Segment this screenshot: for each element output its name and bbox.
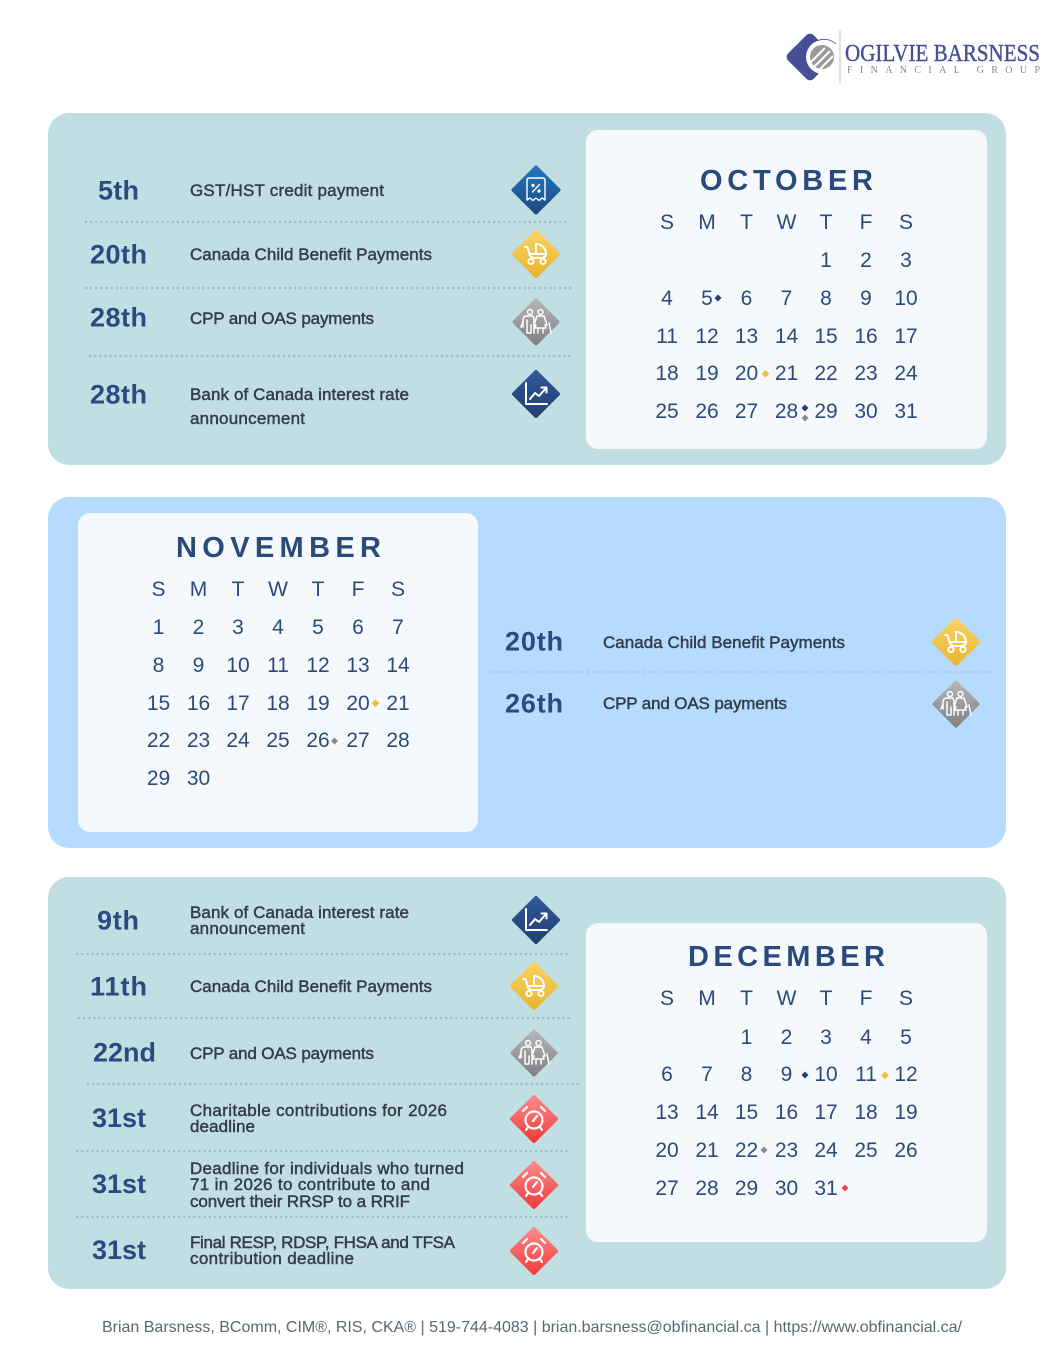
calendar dates: 4 bbox=[661, 287, 673, 310]
calendar dates: 8 bbox=[153, 654, 164, 677]
calendar dates: 1 bbox=[153, 616, 164, 639]
month title: NOVEMBER bbox=[176, 532, 381, 564]
calendar dates: 2 bbox=[781, 1026, 792, 1049]
calendar dates: 25 bbox=[854, 1139, 878, 1162]
calendar dates: 23 bbox=[854, 362, 878, 385]
calendar dates: T bbox=[740, 987, 753, 1010]
calendar dates: 15 bbox=[147, 692, 170, 715]
calendar: December bbox=[586, 923, 987, 1242]
icon: alarm clock bbox=[512, 1229, 556, 1273]
calendar dates: 25 bbox=[266, 729, 290, 752]
October row: 28th Bank of Canada bbox=[90, 372, 558, 428]
December row: 31st RESP bbox=[92, 1229, 556, 1273]
icon: seniors bbox=[514, 300, 558, 344]
October row: 28th Bank of Canada: announcement bbox=[190, 409, 305, 428]
panel: October bbox=[48, 113, 1006, 465]
December row: 9th: announcement bbox=[190, 919, 305, 938]
icon: chart bbox=[514, 372, 558, 416]
calendar dates: 18 bbox=[266, 692, 290, 715]
calendar dates: T bbox=[312, 578, 325, 601]
December row: 31st charitable: Charitable contributions for 2026 bbox=[190, 1101, 447, 1120]
calendar dates: S bbox=[660, 987, 674, 1010]
icon: alarm clock bbox=[512, 1097, 556, 1141]
calendar dates: 6 bbox=[661, 1063, 673, 1086]
calendar dates: 9 bbox=[860, 287, 872, 310]
October row: 5th: GST/HST credit payment bbox=[190, 181, 384, 200]
calendar dates: 27 bbox=[346, 729, 370, 752]
calendar dates: W bbox=[268, 578, 288, 601]
month title: OCTOBER bbox=[700, 165, 873, 197]
calendar dates: 9 bbox=[193, 654, 204, 677]
calendar dates: T bbox=[820, 211, 833, 234]
calendar dates: 14 bbox=[775, 325, 798, 348]
December row: 31st RRSP: Deadline for individuals who turned bbox=[190, 1159, 464, 1178]
December row: 31st RESP: contribution deadline bbox=[190, 1249, 354, 1268]
calendar dates: 16 bbox=[775, 1101, 798, 1124]
calendar dates: 6 bbox=[741, 287, 752, 310]
calendar dates: 2 bbox=[860, 249, 872, 272]
calendar dates: 17 bbox=[226, 692, 250, 715]
December row: 31st charitable: deadline bbox=[190, 1117, 255, 1136]
calendar dates: 19 bbox=[894, 1101, 918, 1124]
calendar dates: 30 bbox=[187, 767, 210, 790]
date markers bbox=[714, 294, 808, 422]
December row: 22nd: 22nd bbox=[93, 1038, 156, 1068]
calendar dates: 29 bbox=[814, 400, 838, 423]
calendar dates: S bbox=[151, 578, 166, 601]
calendar dates: 19 bbox=[695, 362, 719, 385]
calendar dates: 28 bbox=[775, 400, 798, 423]
calendar dates: M bbox=[698, 987, 716, 1010]
calendar dates: 14 bbox=[386, 654, 410, 677]
December row: 31st RRSP bbox=[92, 1159, 556, 1211]
calendar dates: 21 bbox=[775, 362, 798, 385]
calendar dates: 28 bbox=[386, 729, 410, 752]
calendar dates: 15 bbox=[814, 325, 838, 348]
calendar dates: 31 bbox=[894, 400, 918, 423]
calendar dates: S bbox=[391, 578, 405, 601]
icon: tax receipt bbox=[514, 168, 558, 212]
calendar dates: 26 bbox=[695, 400, 719, 423]
December row: 9th: 9th bbox=[97, 906, 139, 936]
calendar dates: 22 bbox=[735, 1139, 758, 1162]
calendar dates: 24 bbox=[894, 362, 918, 385]
calendar dates: 23 bbox=[187, 729, 210, 752]
calendar dates: 3 bbox=[820, 1026, 832, 1049]
calendar dates: 5 bbox=[900, 1026, 912, 1049]
December row: 31st charitable: 31st bbox=[92, 1103, 146, 1133]
calendar dates: 29 bbox=[147, 767, 170, 790]
October row: 5th bbox=[98, 168, 558, 212]
calendar dates: F bbox=[352, 578, 364, 601]
calendar dates: 11 bbox=[855, 1063, 877, 1086]
December row: 11th: 11th bbox=[90, 972, 147, 1002]
calendar dates: 8 bbox=[820, 287, 832, 310]
calendar dates: 5 bbox=[701, 287, 713, 310]
calendar dates: F bbox=[860, 211, 872, 234]
calendar dates: 25 bbox=[655, 400, 679, 423]
calendar dates: T bbox=[820, 987, 833, 1010]
calendar dates: T bbox=[740, 211, 753, 234]
December row: 9th: Bank of Canada interest rate bbox=[190, 903, 409, 922]
calendar dates bbox=[655, 211, 918, 423]
December row: 11th: Canada Child Benefit Payments bbox=[190, 977, 432, 996]
calendar dates: F bbox=[860, 987, 872, 1010]
calendar dates: 27 bbox=[735, 400, 758, 423]
calendar dates bbox=[147, 578, 410, 790]
calendar dates: T bbox=[232, 578, 245, 601]
icon: stroller bbox=[512, 964, 556, 1008]
panel: November bbox=[48, 497, 1006, 848]
December row: 31st RESP: Final RESP, RDSP, FHSA and TFSA bbox=[190, 1233, 456, 1252]
October row: 5th: 5th bbox=[98, 176, 139, 206]
calendar dates: 4 bbox=[860, 1026, 872, 1049]
calendar dates: 22 bbox=[814, 362, 838, 385]
calendar dates: 21 bbox=[386, 692, 410, 715]
October row: 20th bbox=[90, 232, 558, 276]
calendar dates: W bbox=[777, 211, 797, 234]
panel: December bbox=[48, 877, 1006, 1289]
calendar dates: 26 bbox=[894, 1139, 918, 1162]
logo bbox=[785, 30, 1040, 84]
calendar dates: 1 bbox=[741, 1026, 752, 1049]
calendar dates: 26 bbox=[306, 729, 330, 752]
November row: 20th bbox=[505, 620, 978, 664]
December row: 31st RRSP: 71 in 2026 to contribute to and bbox=[190, 1175, 430, 1194]
November row: 26th: CPP and OAS payments bbox=[603, 694, 787, 713]
calendar dates: 24 bbox=[226, 729, 250, 752]
calendar dates: 11 bbox=[267, 654, 289, 677]
October row: 20th: 20th bbox=[90, 240, 147, 270]
calendar dates: M bbox=[190, 578, 207, 601]
October row: 28th Bank of Canada: Bank of Canada interest rate bbox=[190, 385, 409, 404]
logo mark bbox=[785, 32, 840, 82]
calendar dates: 10 bbox=[226, 654, 250, 677]
calendar dates: 11 bbox=[656, 325, 678, 348]
calendar dates: 7 bbox=[701, 1063, 713, 1086]
footer contact line: Brian Barsness, BComm, CIM®, RIS, CKA® | 519-744-4083 | brian.barsness@obfinancial.ca | https://www.obfinancial.ca/ bbox=[102, 1319, 963, 1336]
icon: stroller bbox=[934, 620, 978, 664]
calendar dates: M bbox=[698, 211, 716, 234]
calendar dates: 12 bbox=[894, 1063, 918, 1086]
calendar dates: 16 bbox=[187, 692, 210, 715]
calendar: October bbox=[586, 130, 987, 449]
calendar dates: 20 bbox=[655, 1139, 679, 1162]
icon: seniors bbox=[934, 682, 978, 726]
October row: 28th Bank of Canada: 28th bbox=[90, 380, 147, 410]
calendar dates: 13 bbox=[735, 325, 758, 348]
calendar dates: 15 bbox=[735, 1101, 758, 1124]
icon: seniors bbox=[512, 1032, 556, 1074]
date markers bbox=[760, 1072, 889, 1192]
calendar dates: 1 bbox=[820, 249, 832, 272]
December row: 31st charitable bbox=[92, 1097, 556, 1141]
calendar dates: 2 bbox=[193, 616, 204, 639]
calendar: November bbox=[78, 513, 478, 832]
calendar dates: 30 bbox=[775, 1177, 798, 1200]
November row: 20th: 20th bbox=[505, 626, 563, 656]
December row: 11th bbox=[90, 964, 556, 1008]
calendar dates: 16 bbox=[854, 325, 878, 348]
December row: 31st RESP: 31st bbox=[92, 1235, 146, 1265]
calendar dates: 18 bbox=[854, 1101, 878, 1124]
calendar dates: 9 bbox=[781, 1063, 792, 1086]
calendar dates: 7 bbox=[781, 287, 792, 310]
calendar dates: 29 bbox=[735, 1177, 758, 1200]
calendar dates: S bbox=[899, 987, 913, 1010]
October row: 28th CPP: 28th bbox=[90, 302, 147, 332]
calendar dates: 5 bbox=[312, 616, 324, 639]
calendar dates: 18 bbox=[655, 362, 679, 385]
calendar dates: 21 bbox=[695, 1139, 719, 1162]
calendar dates: 7 bbox=[392, 616, 404, 639]
December row: 22nd bbox=[93, 1032, 556, 1074]
calendar dates: 6 bbox=[352, 616, 364, 639]
date markers bbox=[331, 700, 379, 744]
calendar dates: S bbox=[899, 211, 913, 234]
calendar dates: 22 bbox=[147, 729, 170, 752]
October row: 28th CPP bbox=[90, 300, 558, 344]
November row: 26th bbox=[505, 682, 978, 726]
logo tagline: FINANCIAL GROUP bbox=[847, 65, 1040, 76]
November row: 26th: 26th bbox=[505, 688, 563, 718]
calendar dates: 8 bbox=[741, 1063, 752, 1086]
calendar dates: W bbox=[777, 987, 797, 1010]
calendar dates: 13 bbox=[346, 654, 370, 677]
October row: 20th: Canada Child Benefit Payments bbox=[190, 245, 432, 264]
calendar dates: 30 bbox=[854, 400, 878, 423]
calendar dates: 17 bbox=[814, 1101, 838, 1124]
calendar dates: 27 bbox=[655, 1177, 679, 1200]
December row: 31st RRSP: convert their RRSP to a RRIF bbox=[190, 1192, 410, 1211]
month title: DECEMBER bbox=[688, 941, 885, 973]
calendar dates: 10 bbox=[814, 1063, 838, 1086]
December row: 22nd: CPP and OAS payments bbox=[190, 1044, 374, 1063]
December row: 9th bbox=[97, 898, 558, 942]
calendar dates: 12 bbox=[695, 325, 719, 348]
December row: 31st RRSP: 31st bbox=[92, 1169, 146, 1199]
calendar dates: 10 bbox=[894, 287, 918, 310]
calendar dates: 17 bbox=[894, 325, 918, 348]
calendar dates: 24 bbox=[814, 1139, 838, 1162]
calendar dates: 31 bbox=[814, 1177, 838, 1200]
calendar dates: 12 bbox=[306, 654, 330, 677]
calendar dates: 14 bbox=[695, 1101, 719, 1124]
calendar dates: 3 bbox=[232, 616, 244, 639]
icon: stroller bbox=[514, 232, 558, 276]
calendar dates: 3 bbox=[900, 249, 912, 272]
November row: 20th: Canada Child Benefit Payments bbox=[603, 633, 845, 652]
calendar dates: 13 bbox=[655, 1101, 679, 1124]
calendar dates: 23 bbox=[775, 1139, 798, 1162]
icon: alarm clock bbox=[512, 1163, 556, 1207]
calendar dates: 20 bbox=[346, 692, 370, 715]
icon: chart bbox=[514, 898, 558, 942]
October row: 28th CPP: CPP and OAS payments bbox=[190, 309, 374, 328]
calendar dates: 28 bbox=[695, 1177, 719, 1200]
calendar dates: 20 bbox=[735, 362, 758, 385]
calendar dates: 19 bbox=[306, 692, 330, 715]
calendar dates bbox=[655, 987, 918, 1200]
calendar dates: 4 bbox=[272, 616, 284, 639]
calendar dates: S bbox=[660, 211, 674, 234]
